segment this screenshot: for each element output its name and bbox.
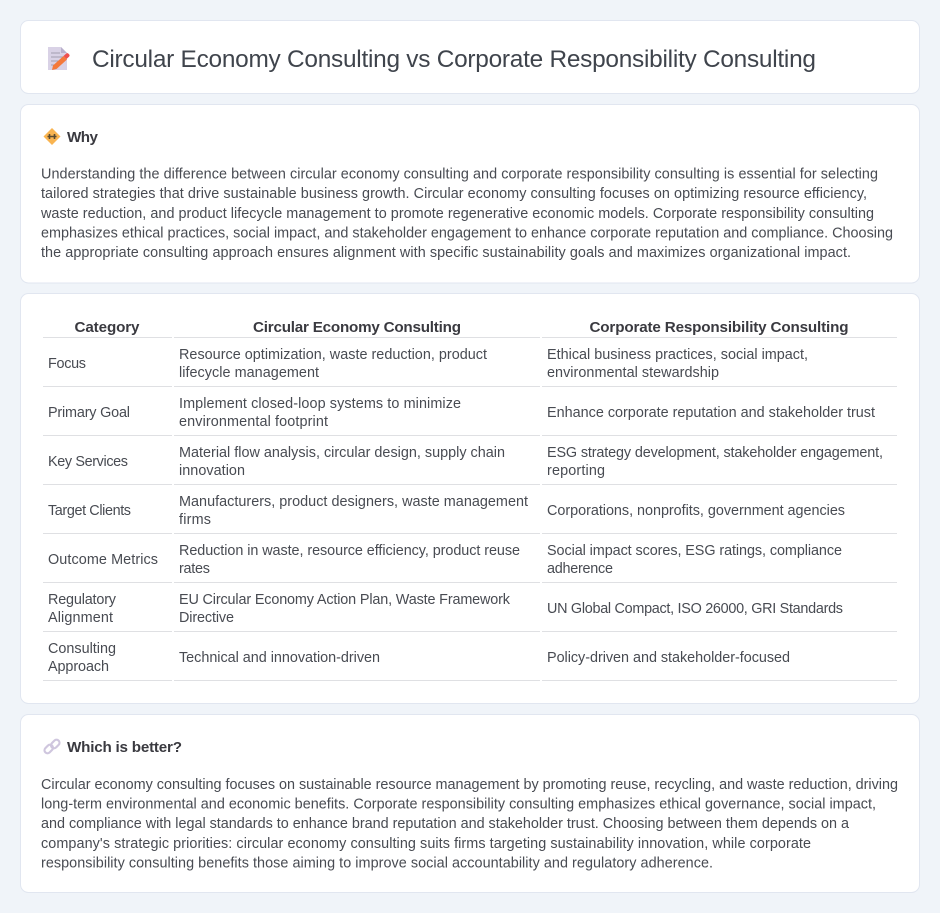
row: primary goal: Enhance corporate reputation and stakeholder trust [547,405,875,421]
row: focus: Focus [48,356,86,372]
row: regulatory alignment: Regulatory [48,592,117,608]
row: focus: Resource optimization, waste reduction, product [179,347,487,363]
row: regulatory alignment: Alignment [48,610,113,626]
row: primary goal: environmental footprint [179,414,328,430]
table header: Category [74,319,140,336]
row: consulting approach [48,641,790,675]
table header: Circular Economy Consulting [253,319,461,336]
row: focus: environmental stewardship [547,365,719,381]
row: key services: reporting [547,463,605,479]
text block: why paragraph: tailored strategies that drive sustainable business growth. Circular economy consulting focuses on optimizing resource efficiency, [41,186,867,202]
text block: why paragraph: Understanding the difference between circular economy consulting and corporate responsibility consulting is essential for selecting [41,167,878,183]
icon: memo with pencil [48,47,70,70]
row: key services: Material flow analysis, circular design, supply chain [179,445,505,461]
row: target clients [48,494,845,528]
row: regulatory alignment: Directive [179,610,234,626]
row: target clients: firms [179,512,211,528]
row: regulatory alignment: UN Global Compact, ISO 26000, GRI Standards [547,601,843,617]
row: focus [48,347,808,381]
text block: which is better paragraph: responsibility consulting benefits those aiming to improve social accountability and regulatory adherence. [41,855,713,871]
row: outcome metrics: Social impact scores, ESG ratings, compliance [547,543,842,559]
panel: which is better [20,714,920,892]
panel: comparison table [20,294,920,704]
icon: chain link [43,739,61,754]
row: consulting approach: Technical and innovation-driven [179,650,380,666]
text block: which is better paragraph: and compliance with legal standards to enhance brand reputation and stakeholder trust. Choosing between them depends on a [41,816,849,832]
row: outcome metrics [48,543,842,577]
table header [74,319,848,336]
row: key services: innovation [179,463,245,479]
row: outcome metrics: Outcome Metrics [48,552,158,568]
heading: which is better: Which is better? [67,739,182,756]
row: focus: Ethical business practices, social impact, [547,347,808,363]
panel: header [20,20,920,94]
text block: why paragraph: emphasizes ethical practices, social impact, and stakeholder engagement to enhance corporate reputation and compliance. Choosing [41,225,893,241]
row: key services [48,445,883,479]
row: regulatory alignment: EU Circular Economy Action Plan, Waste Framework [179,592,511,608]
row: target clients: Corporations, nonprofits, government agencies [547,503,845,519]
panel: why [20,104,920,283]
row: outcome metrics: adherence [547,561,613,577]
icon: orange diamond [44,128,60,145]
text block: why paragraph: the appropriate consulting approach ensures alignment with specific sustainability goals and maximizes organizational impact. [41,245,851,261]
text block: which is better paragraph [41,777,898,871]
text block: which is better paragraph: company's strategic priorities: circular economy consulting suits firms targeting sustainability innovation, while corporate [41,836,811,852]
row: consulting approach: Approach [48,659,109,675]
row: key services: Key Services [48,454,128,470]
text block: which is better paragraph: Circular economy consulting focuses on sustainable resource management by promoting reuse, recycling, and waste reduction, driving [41,777,898,793]
text block: why paragraph: waste reduction, and product lifecycle management to promote regenerative economic models. Corporate responsibility consulting [40,206,874,222]
table header: Corporate Responsibility Consulting [590,319,848,336]
row: primary goal: Implement closed-loop systems to minimize [179,396,461,412]
text block: which is better paragraph: long-term environmental and economic benefits. Corporate responsibility consulting emphasizes ethical governance, social impact, [41,797,876,813]
row: primary goal: Primary Goal [48,405,130,421]
row: focus: lifecycle management [179,365,319,381]
row: consulting approach: Consulting [48,641,116,657]
row: outcome metrics: rates [179,561,210,577]
row: consulting approach: Policy-driven and stakeholder-focused [547,650,790,666]
row: target clients: Target Clients [48,503,131,519]
row: outcome metrics: Reduction in waste, resource efficiency, product reuse [179,543,520,559]
text block: why paragraph [40,167,893,261]
title: Circular Economy Consulting vs Corporate Responsibility Consulting [92,46,816,73]
row: regulatory alignment [48,592,843,626]
row: key services: ESG strategy development, stakeholder engagement, [547,445,883,461]
row: primary goal [48,396,875,430]
heading: why: Why [67,129,99,146]
row: target clients: Manufacturers, product designers, waste management [179,494,528,510]
